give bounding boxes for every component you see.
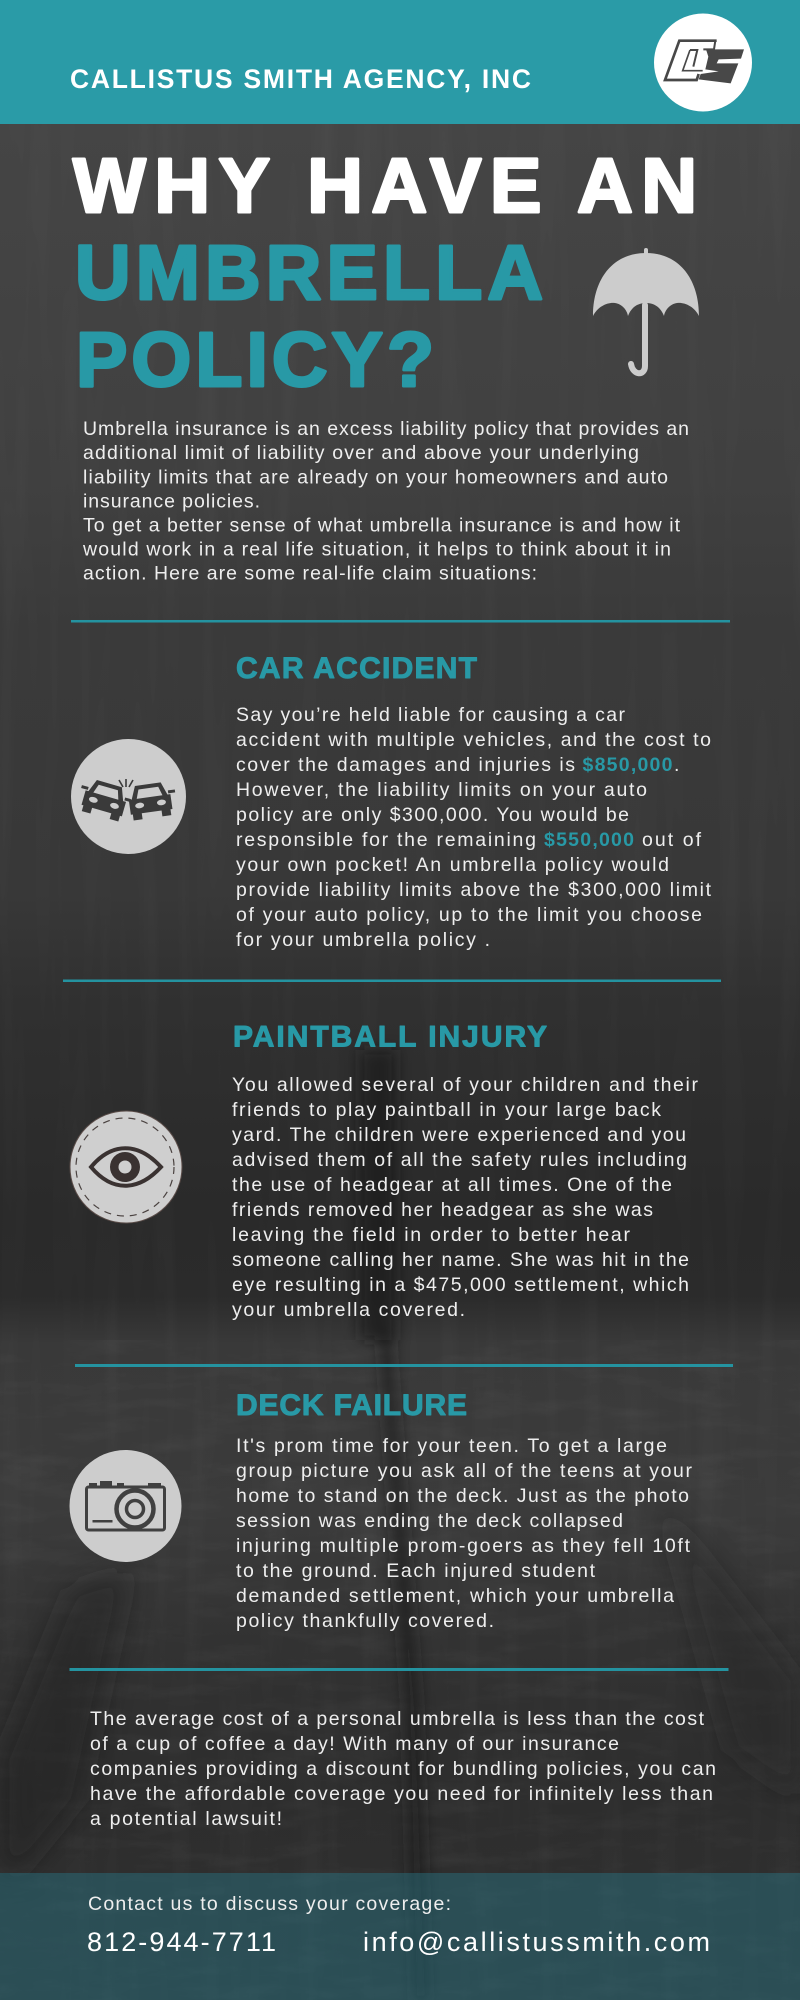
body text: car accident: provide liability limits above the $300,000 limit xyxy=(236,879,712,901)
body text: car accident: of your auto policy, up to the limit you choose xyxy=(236,904,702,926)
panel: car accident xyxy=(71,652,712,951)
closing text: have the affordable coverage you need for infinitely less than xyxy=(90,1783,713,1805)
intro text: additional limit of liability over and above your underlying xyxy=(83,442,639,464)
body text: paintball injury: yard. The children were experienced and you xyxy=(232,1124,686,1146)
icon: umbrella xyxy=(593,248,699,373)
email address: info@callistussmith.com xyxy=(363,1927,710,1957)
heading: paintball injury: PAINTBALL INJURY xyxy=(233,1020,547,1054)
title: WHY HAVE AN xyxy=(73,143,697,229)
body text: car accident: for your umbrella policy . xyxy=(236,929,490,951)
body text: paintball injury: eye resulting in a $475,000 settlement, which xyxy=(232,1274,689,1296)
body text: paintball injury: friends to play paintball in your large back xyxy=(232,1099,661,1121)
logo: CS badge xyxy=(654,14,752,112)
body text: car accident: cover the damages and injuries is xyxy=(236,754,575,776)
body text: car accident: $550,000 xyxy=(544,829,634,851)
body text: paintball injury xyxy=(232,1074,699,1321)
body text: deck failure: demanded settlement, which your umbrella xyxy=(236,1585,674,1607)
body text: car accident: However, the liability limits on your auto xyxy=(236,779,647,801)
body text: car accident: your own pocket! An umbrella policy would xyxy=(236,854,669,876)
body text: car accident: accident with multiple vehicles, and the cost to xyxy=(236,729,711,751)
heading: car accident: CAR ACCIDENT xyxy=(236,652,477,685)
body text: car accident: . xyxy=(674,754,679,776)
intro text: action. Here are some real-life claim situations: xyxy=(83,562,537,584)
heading: deck failure: DECK FAILURE xyxy=(236,1389,467,1422)
body text: deck failure: to the ground. Each injured student xyxy=(236,1560,596,1582)
intro text: Umbrella insurance is an excess liability policy that provides an xyxy=(83,418,689,440)
body text: deck failure: session was ending the deck collapsed xyxy=(236,1510,623,1532)
body text: car accident: out of xyxy=(642,829,702,851)
body text: car accident: policy are only $300,000. You would be xyxy=(236,804,629,826)
body text: paintball injury: leaving the field in order to better hear xyxy=(232,1224,630,1246)
body text: paintball injury: friends removed her headgear as she was xyxy=(232,1199,653,1221)
body text: paintball injury: your umbrella covered. xyxy=(232,1299,465,1321)
body text: deck failure: home to stand on the deck. Just as the photo xyxy=(236,1485,689,1507)
intro text xyxy=(82,418,689,584)
closing text: a potential lawsuit! xyxy=(90,1808,282,1830)
contact prompt: Contact us to discuss your coverage: xyxy=(88,1893,451,1915)
title: POLICY? xyxy=(76,317,434,403)
body text: paintball injury: someone calling her name. She was hit in the xyxy=(232,1249,689,1271)
agency name: CALLISTUS SMITH AGENCY, INC xyxy=(70,64,531,94)
body text: paintball injury: advised them of all the safety rules including xyxy=(232,1149,687,1171)
title xyxy=(73,143,697,403)
body text: car accident: responsible for the remaining xyxy=(236,829,536,851)
body text: deck failure: It's prom time for your teen. To get a large xyxy=(236,1435,667,1457)
body text: deck failure: group picture you ask all of the teens at your xyxy=(236,1460,692,1482)
closing text: companies providing a discount for bundling policies, you can xyxy=(90,1758,716,1780)
panel: deck failure xyxy=(70,1389,692,1632)
closing text xyxy=(90,1708,716,1830)
body text: paintball injury: You allowed several of your children and their xyxy=(232,1074,699,1096)
body text: deck failure xyxy=(236,1435,692,1632)
icon: eye xyxy=(70,1111,182,1223)
body text: car accident: $850,000 xyxy=(582,754,673,776)
phone number: 812-944-7711 xyxy=(87,1927,276,1957)
intro text: would work in a real life situation, it helps to think about it in xyxy=(82,538,671,560)
footer contact band xyxy=(0,1873,800,2000)
icon: camera xyxy=(70,1450,182,1562)
body text: car accident xyxy=(236,704,712,951)
icon: car crash xyxy=(71,739,186,854)
body text: car accident: Say you’re held liable for causing a car xyxy=(236,704,626,726)
intro text: insurance policies. xyxy=(83,490,260,512)
closing text: of a cup of coffee a day! With many of our insurance xyxy=(90,1733,619,1755)
intro text: To get a better sense of what umbrella insurance is and how it xyxy=(83,514,681,536)
body text: deck failure: injuring multiple prom-goers as they fell 10ft xyxy=(236,1535,691,1557)
intro text: liability limits that are already on your homeowners and auto xyxy=(83,466,668,488)
header bar xyxy=(0,0,800,124)
closing text: The average cost of a personal umbrella is less than the cost xyxy=(90,1708,705,1730)
body text: deck failure: policy thankfully covered. xyxy=(236,1610,494,1632)
panel: paintball injury xyxy=(70,1020,699,1321)
body text: paintball injury: the use of headgear at all times. One of the xyxy=(232,1174,672,1196)
title: UMBRELLA xyxy=(75,230,543,316)
